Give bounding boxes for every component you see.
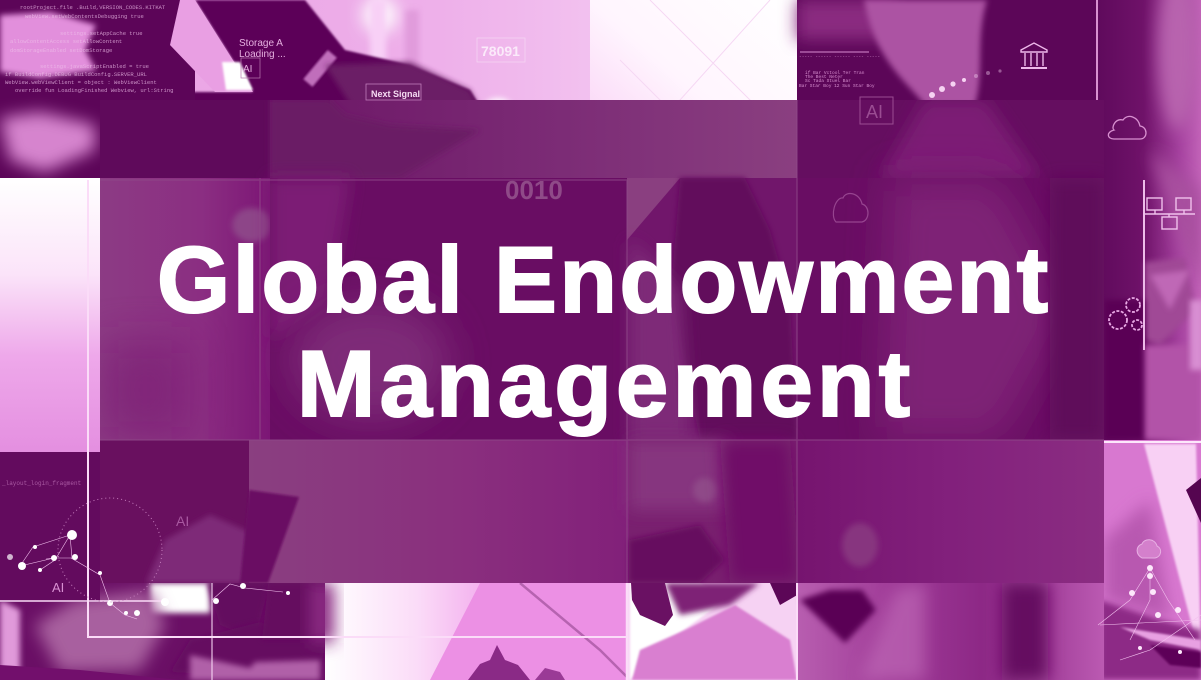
tile: top-left code screen: if BuildConfig.DEBUG BuildConfig.SERVER_URL [5, 71, 147, 78]
screen labels on photo [239, 38, 1195, 558]
frame lines [0, 180, 797, 680]
network glow bottom left: AI [52, 580, 64, 595]
tile: top centre, hand over device [195, 0, 590, 100]
network glow bottom right [1098, 565, 1201, 660]
tile: top-left code screen: settings.javaScriptEnabled = true [40, 63, 149, 70]
label: AI box [860, 97, 893, 124]
dark block at lower left: _layout_login_fragment [1, 480, 81, 487]
tile: top right dark panel: Bar Star Boy 12 Sun Star Boy [799, 83, 875, 89]
icon: network computers [1144, 198, 1195, 229]
tile: top right dark panel: if Bar Vctool Ter Tran [805, 70, 865, 76]
banner grid lines [100, 100, 1104, 583]
tile: right strip [1097, 0, 1201, 440]
label: storage loading [239, 38, 286, 78]
tile: top-left code screen: domStorageEnabled setDomStorage [10, 47, 112, 54]
label: 0010: 0010 [505, 175, 563, 205]
tile: bottom centre, writing hand [628, 583, 796, 680]
label: next signal [366, 84, 421, 100]
banner tone: top band [100, 100, 270, 178]
dark block at lower left [0, 452, 100, 602]
divider line top right [1096, 0, 1098, 100]
tile: top-left code screen: settings.setAppCache true [60, 30, 143, 37]
title [157, 227, 1048, 436]
tile: bottom left, hands and laptop [0, 583, 330, 680]
tile: top-left code screen: webView.setWebContentsDebugging true [25, 13, 144, 20]
tile: top right dark panel: ----- ------ ------ ---- ----- [799, 55, 880, 60]
icon: gears [1109, 298, 1142, 330]
banner tone: lower right [797, 440, 1104, 583]
network glow bottom left: AI [176, 513, 189, 529]
tile: top right dark panel: Sc Tada Stuel Bar [805, 78, 851, 84]
tile: top right dark panel [797, 0, 1097, 180]
banner tone: lower left [100, 441, 200, 460]
title: Management [297, 331, 910, 436]
tile: left strip [0, 178, 100, 452]
title: Global Endowment [157, 227, 1048, 332]
label: 78091: 78091 [481, 43, 520, 59]
tile: bottom centre, pink sheet [310, 583, 630, 680]
icon: cloud corner [1137, 540, 1161, 558]
tile: top-left code screen: allowContentAccess setAllowContent [10, 38, 122, 45]
label: AI box: AI [866, 102, 883, 122]
translucent banner panel [100, 100, 1104, 583]
icon: cloud [1108, 116, 1146, 139]
banner tone: lower centre [629, 440, 797, 583]
network glow bottom left [7, 498, 290, 619]
label: next signal: Next Signal [371, 89, 420, 99]
tile: top-left code screen: override fun LoadingFinished Webview, url:String [15, 87, 173, 94]
tile: top-left code screen [0, 0, 253, 178]
label: 78091 [477, 38, 525, 62]
tile: top white panel with crossing lines [590, 0, 797, 180]
tile: top-left code screen: rootProject.file .Build,VERSION_CODES.KITKAT [20, 4, 166, 11]
tile: bottom right, data streaks [797, 583, 1104, 680]
banner tone: mid left [100, 178, 270, 440]
label: storage loading: Loading ... [239, 49, 286, 60]
tile: top-left code screen: WebView.webViewClient = object : WebViewClient [5, 79, 157, 86]
label: storage loading: Storage A [239, 38, 283, 49]
icon: cloud faint [833, 193, 868, 222]
label: storage loading: AI [243, 64, 252, 75]
tile: top right dark panel: The Best Neter [805, 74, 843, 80]
tile: bottom right corner [1100, 440, 1201, 680]
icon: bank [1021, 43, 1047, 68]
